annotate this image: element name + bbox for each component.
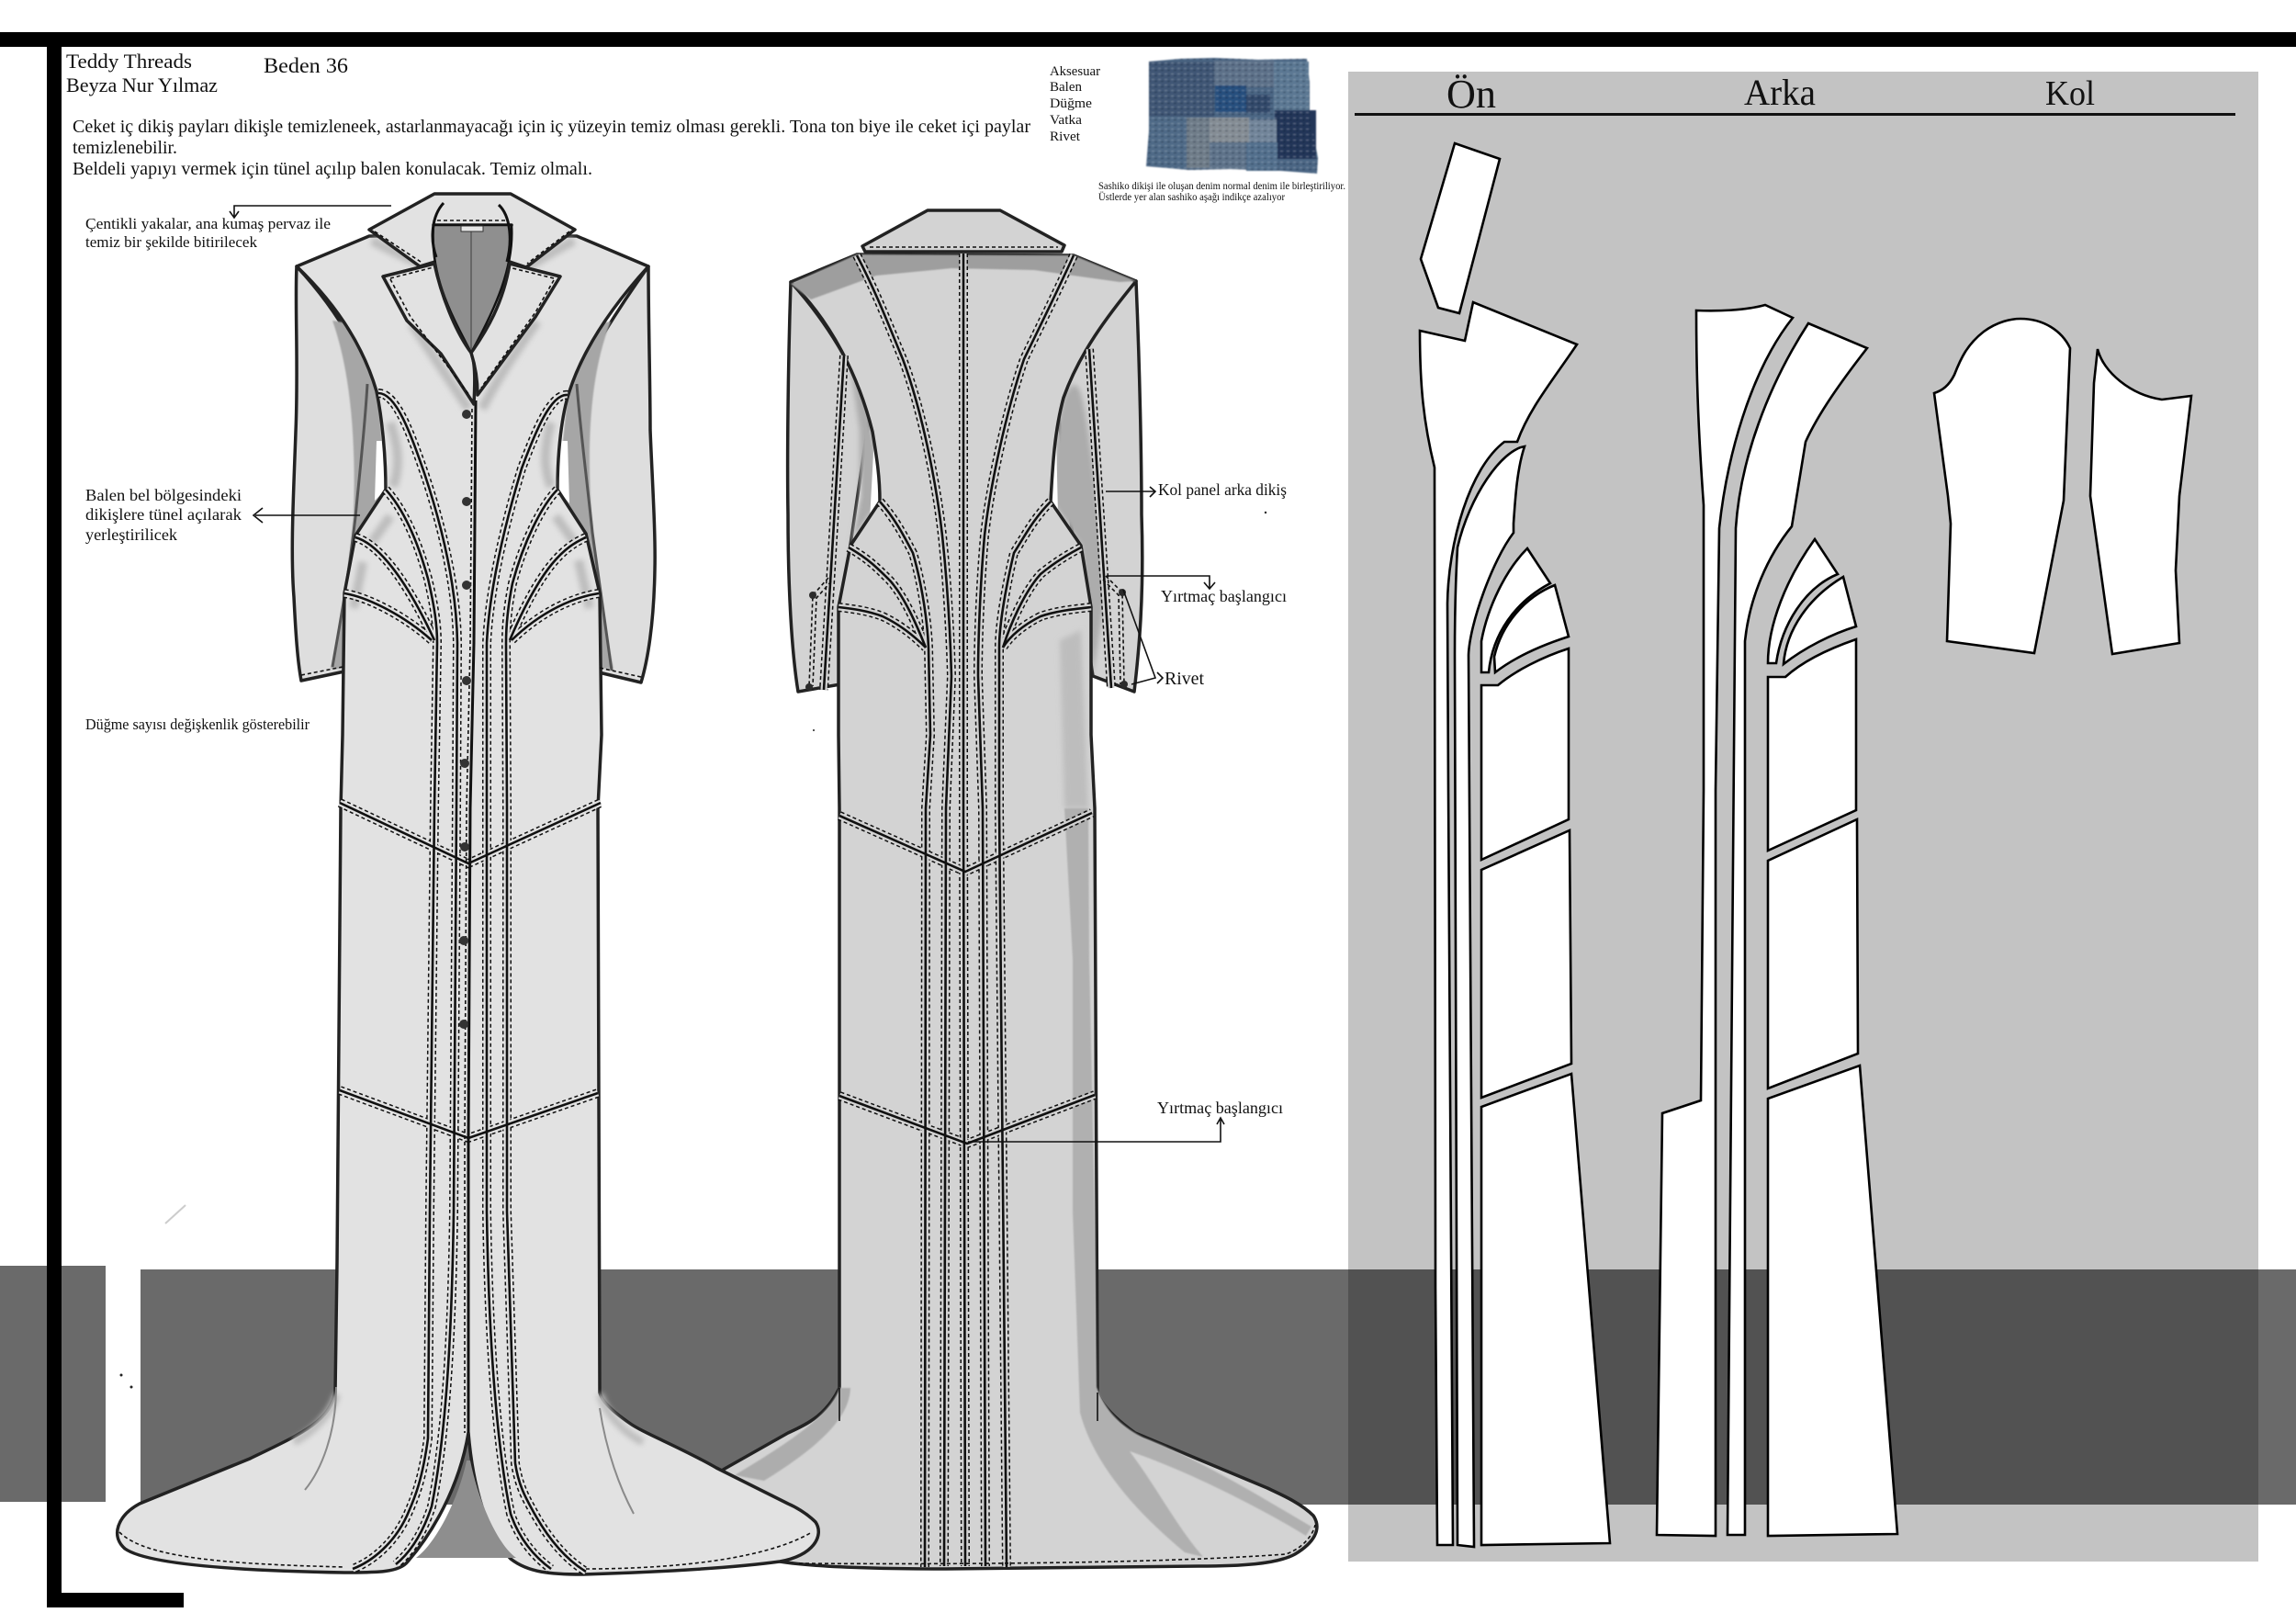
accessories list: Aksesuar bbox=[1050, 64, 1100, 79]
dark band: left block bbox=[0, 1266, 106, 1502]
callout: sleeve panel seam: Kol panel arka dikiş bbox=[1158, 480, 1287, 499]
size label: Beden 36 bbox=[264, 54, 348, 77]
back lower skirt panel bbox=[1768, 1066, 1897, 1536]
pattern panel heading line bbox=[1355, 113, 2235, 116]
front upper skirt panel bbox=[1481, 648, 1569, 860]
sleeve seams bbox=[332, 384, 612, 671]
back body bbox=[698, 254, 1317, 1569]
callout: rivet bbox=[1123, 590, 1204, 689]
collar and lapel stitching bbox=[375, 220, 569, 395]
back right sleeve bbox=[1056, 281, 1142, 692]
front right sleeve bbox=[569, 266, 655, 682]
accessories list: Balen bbox=[1050, 80, 1082, 95]
waist gaps bbox=[375, 441, 569, 503]
sleeve shading bbox=[331, 321, 386, 669]
sashiko caption bbox=[1098, 181, 1345, 203]
sashiko caption: Üstlerde yer alan sashiko aşağı indikçe azalıyor bbox=[1098, 190, 1285, 203]
callout: notched collar bbox=[85, 206, 391, 251]
callout: skirt slit start bbox=[968, 1099, 1283, 1142]
accessories list: Rivet bbox=[1050, 130, 1081, 144]
back center piece bbox=[1657, 305, 1793, 1536]
back skirt shading bbox=[1064, 808, 1311, 1557]
back middle skirt panel bbox=[1768, 819, 1858, 1088]
callout: notched collar: temiz bir şekilde bitirilecek bbox=[85, 233, 258, 251]
panel: pattern pieces background bbox=[1348, 72, 2258, 1562]
callout: boning at waist: yerleştirilicek bbox=[85, 525, 177, 544]
callout: sleeve panel seam bbox=[1106, 480, 1287, 499]
back left sleeve bbox=[788, 282, 870, 692]
construction notes paragraph: temizlenebilir. bbox=[73, 138, 177, 158]
dark band: main strip bbox=[141, 1269, 2296, 1505]
back upper skirt panel bbox=[1768, 639, 1856, 851]
sashiko denim swatch bbox=[1146, 58, 1318, 174]
front middle skirt panel bbox=[1481, 830, 1571, 1098]
accessories list bbox=[1050, 64, 1100, 144]
construction notes paragraph bbox=[73, 117, 1030, 179]
body soft shading bbox=[294, 241, 643, 1442]
rivets bbox=[805, 589, 1128, 691]
front view coat illustration bbox=[118, 194, 818, 1574]
lining center line bbox=[470, 230, 472, 349]
back sleeve shading bbox=[847, 342, 1107, 676]
flare fold lines bbox=[305, 1387, 634, 1514]
front seams with double stitching bbox=[340, 393, 601, 1572]
hem stitch bbox=[799, 1525, 1315, 1563]
hem stitching bbox=[119, 1532, 812, 1569]
back fan piece bbox=[1784, 577, 1856, 664]
callout: skirt slit start: Yırtmaç başlangıcı bbox=[1157, 1099, 1283, 1117]
frame: left black bar bbox=[47, 46, 62, 1607]
heading: sleeve: Kol bbox=[2045, 74, 2095, 113]
hanger label bbox=[461, 226, 483, 231]
callout: sleeve vent start: Yırtmaç başlangıcı bbox=[1161, 587, 1287, 605]
front main piece with center strip bbox=[1420, 302, 1577, 1545]
right lapel bbox=[471, 264, 560, 395]
neck opening lining bbox=[433, 225, 512, 353]
back collar bbox=[862, 210, 1064, 252]
waist gaps bbox=[870, 436, 1058, 521]
back yoke shading bbox=[791, 254, 1136, 299]
front body bbox=[118, 236, 818, 1574]
callout: boning at waist bbox=[85, 486, 360, 544]
frame: bottom black bar bbox=[47, 1593, 184, 1607]
back seams with double stitching bbox=[824, 254, 1111, 1567]
upper sleeve piece bbox=[1934, 319, 2070, 653]
collar stitch bbox=[870, 246, 1058, 248]
front collar piece bbox=[1421, 143, 1500, 313]
cuff stitching bbox=[301, 667, 641, 677]
buttons bbox=[459, 410, 471, 1029]
front fan piece bbox=[1494, 585, 1569, 672]
placket stitch bbox=[465, 409, 472, 1433]
front small fan piece bbox=[1481, 548, 1550, 672]
sleeve vents bbox=[809, 576, 1124, 686]
under sleeve piece bbox=[2090, 349, 2191, 654]
back skirt upper shading bbox=[1060, 630, 1088, 808]
callout: boning at waist: dikişlere tünel açılarak bbox=[85, 505, 242, 524]
heading: front: Ön bbox=[1446, 72, 1496, 117]
back small fan piece bbox=[1768, 539, 1838, 663]
pattern pieces: back bbox=[1657, 305, 1897, 1536]
back left flare shading bbox=[735, 1388, 850, 1481]
center front placket bbox=[468, 400, 476, 1433]
sashiko caption: Sashiko dikişi ile oluşan denim normal denim ile birleştiriliyor. bbox=[1098, 181, 1345, 192]
callout: notched collar: Çentikli yakalar, ana kumaş pervaz ile bbox=[85, 215, 331, 232]
front side strip bbox=[1455, 446, 1525, 1547]
accessories list: Vatka bbox=[1050, 113, 1082, 128]
back view coat illustration bbox=[698, 210, 1317, 1569]
heading: back: Arka bbox=[1744, 72, 1816, 113]
brand and designer title bbox=[66, 50, 218, 96]
callout: boning at waist: Balen bel bölgesindeki bbox=[85, 486, 242, 504]
left lapel bbox=[383, 264, 475, 404]
note: button count: Düğme sayısı değişkenlik gösterebilir bbox=[85, 716, 310, 733]
pattern pieces: sleeve bbox=[1934, 319, 2191, 654]
construction notes paragraph: Ceket iç dikiş payları dikişle temizleneek, astarlanmayacağı için iç yüzeyin temiz olması gerekli. Tona ton biye ile ceket içi paylar bbox=[73, 117, 1030, 137]
accessories list: Düğme bbox=[1050, 96, 1092, 111]
front lower skirt panel bbox=[1481, 1074, 1610, 1545]
pattern pieces: front bbox=[1420, 143, 1610, 1547]
collar bbox=[369, 194, 575, 267]
hem opening bbox=[416, 1460, 516, 1558]
back side strip bbox=[1728, 323, 1867, 1535]
front left sleeve bbox=[292, 266, 377, 681]
callout: sleeve vent start bbox=[1107, 576, 1287, 605]
dark band over pattern panel bbox=[1348, 1269, 2258, 1505]
frame: top black bar bbox=[0, 32, 2296, 47]
brand and designer title: Teddy Threads bbox=[66, 50, 192, 73]
brand and designer title: Beyza Nur Yılmaz bbox=[66, 73, 218, 96]
neck curves bbox=[433, 203, 510, 262]
stray marks bbox=[119, 512, 1266, 1389]
callout: rivet: Rivet bbox=[1165, 669, 1204, 689]
construction notes paragraph: Beldeli yapıyı vermek için tünel açılıp balen konulacak. Temiz olmalı. bbox=[73, 159, 592, 179]
